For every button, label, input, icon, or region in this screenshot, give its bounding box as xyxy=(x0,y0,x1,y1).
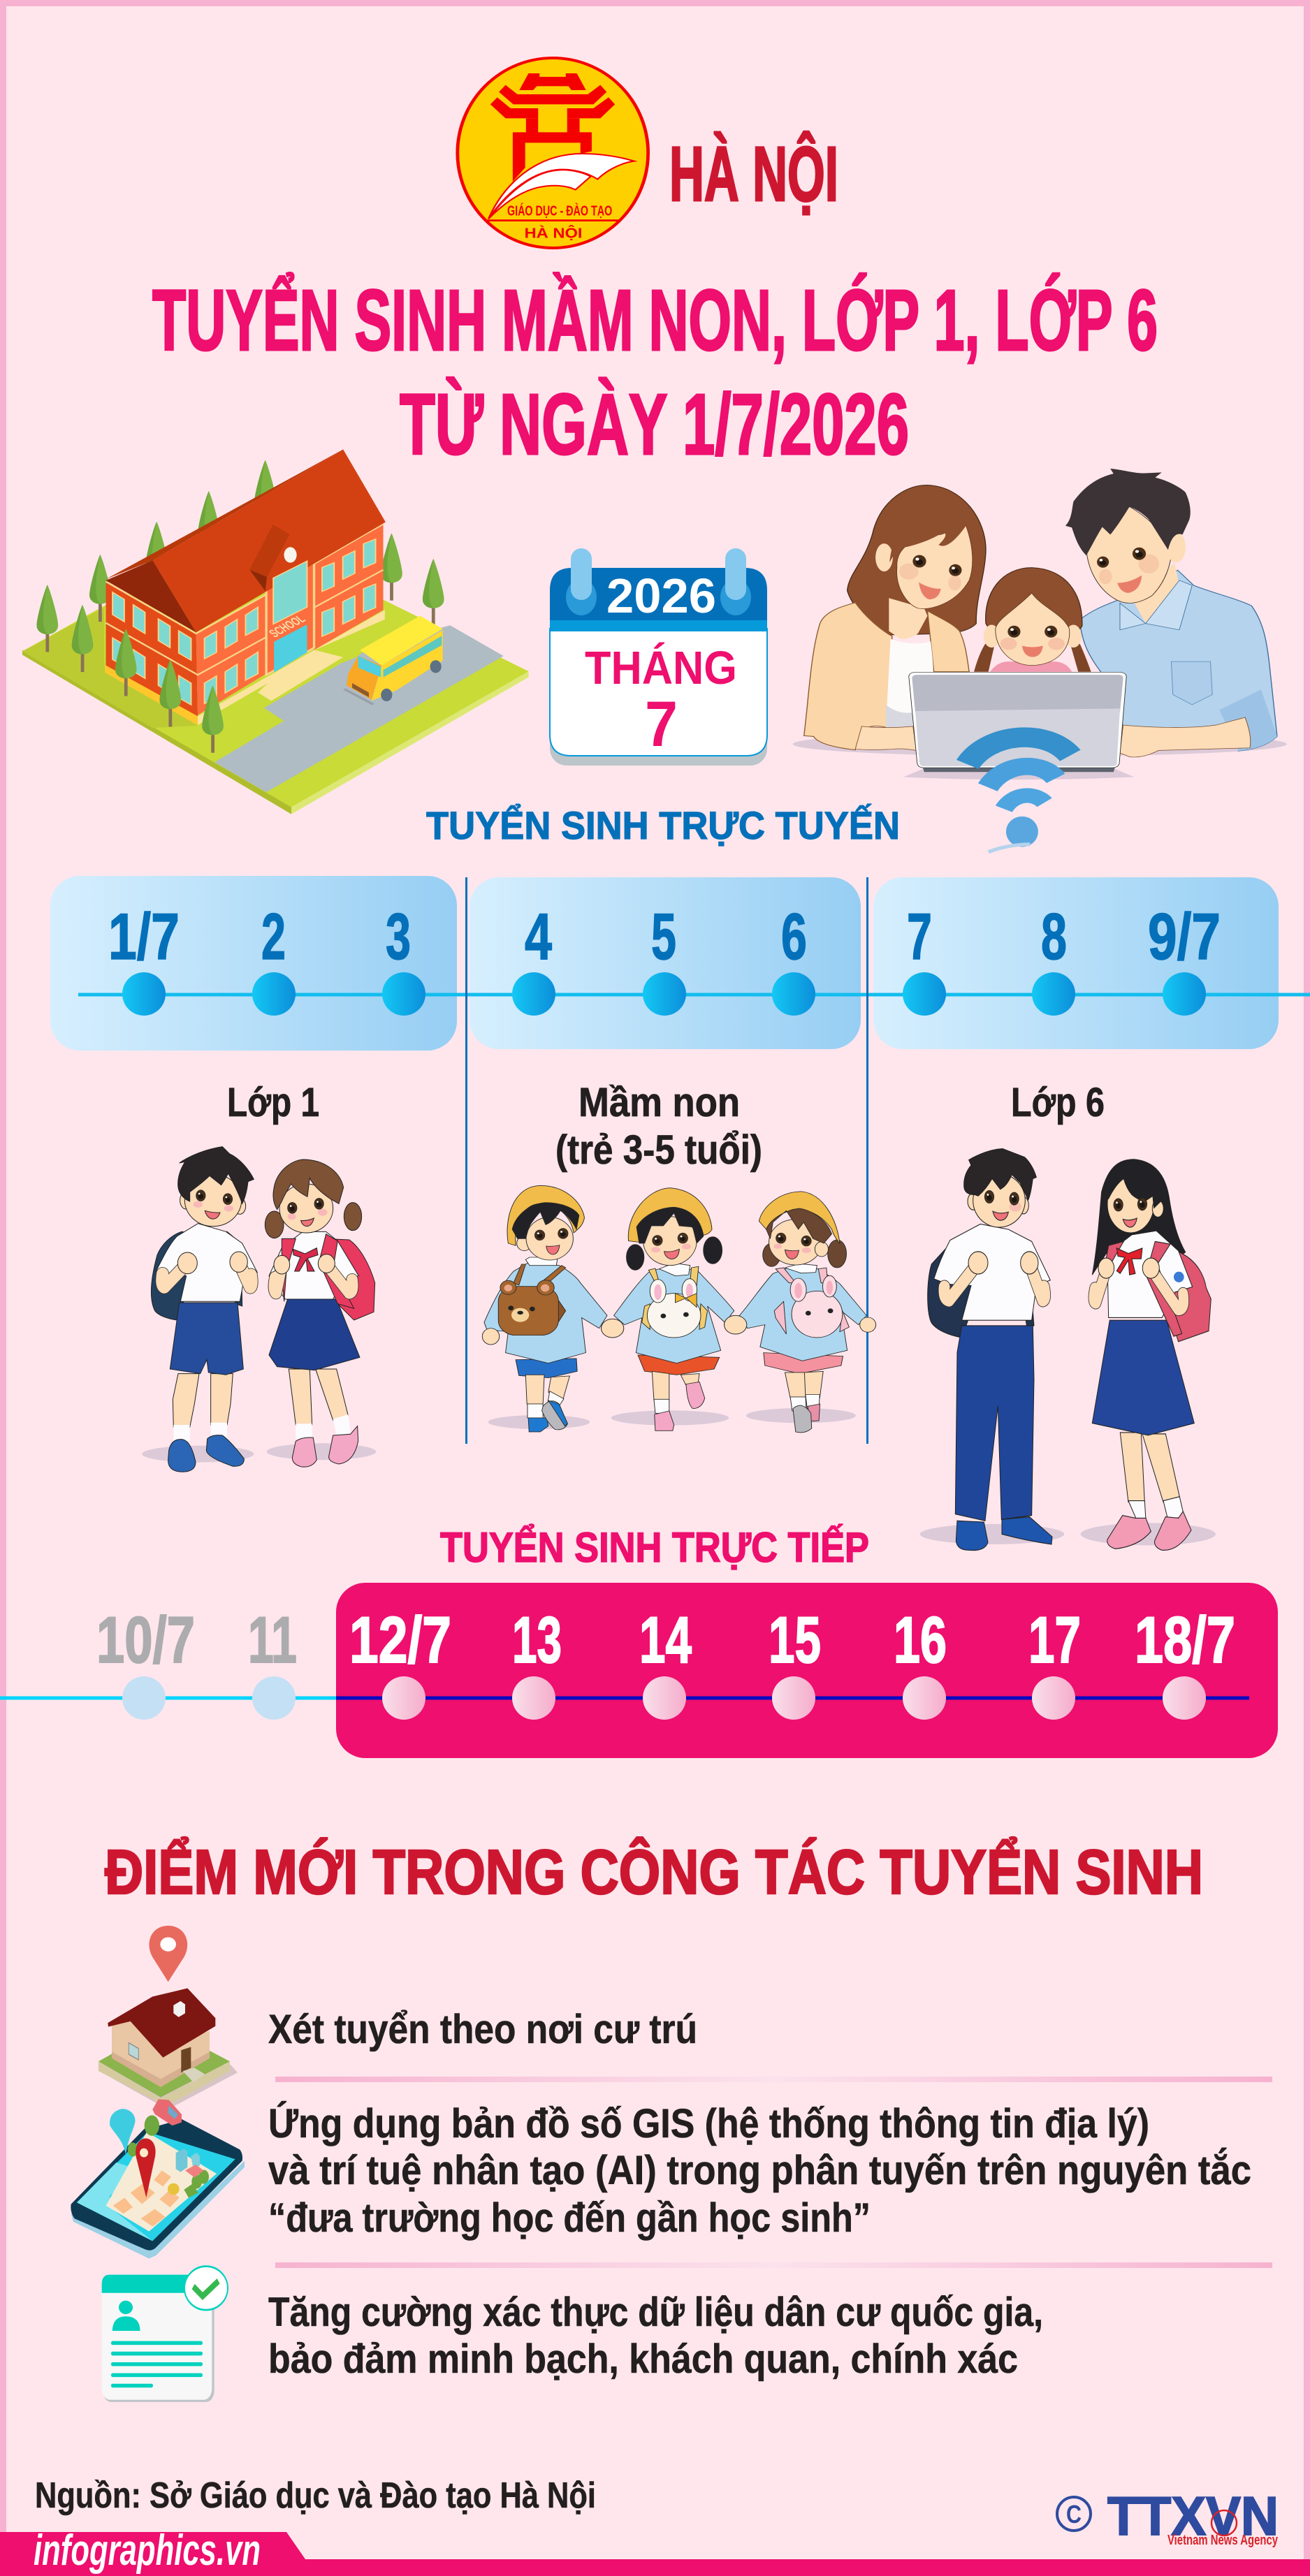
wifi symbol xyxy=(968,738,1070,852)
icon: verified resident record xyxy=(102,2267,228,2402)
column dividers xyxy=(465,877,868,1444)
girl xyxy=(265,1159,375,1467)
calendar: July 2026: 7 xyxy=(645,689,678,760)
logo: TTXVN: TTXVN xyxy=(1107,2485,1279,2547)
icon: phone with GIS map xyxy=(71,2099,245,2259)
illustration: school and bus: SCHOOL xyxy=(266,613,309,640)
footer site name: infographics.vn xyxy=(34,2526,261,2575)
timeline: online enrolment dates xyxy=(50,876,1310,1051)
label: preschool: (trẻ 3-5 tuổi) xyxy=(555,1127,762,1173)
boy xyxy=(151,1147,257,1472)
timeline: in-person enrolment dates: 15 xyxy=(769,1603,821,1676)
text: data verification: Tăng cường xác thực dữ liệu dân cư quốc gia, xyxy=(268,2290,1043,2335)
panel: Grade 1 dates xyxy=(50,876,457,1051)
laptop xyxy=(909,672,1126,772)
girl xyxy=(1092,1159,1211,1550)
daughter xyxy=(974,568,1091,672)
source: Nguồn: Sở Giáo dục và Đào tạo Hà Nội xyxy=(35,2475,596,2516)
timeline: in-person enrolment dates: 18/7 xyxy=(1135,1603,1235,1676)
calendar: July 2026: 2026 xyxy=(606,569,716,623)
illustration: school and bus xyxy=(22,449,529,814)
title: TỪ NGÀY 1/7/2026 xyxy=(400,377,909,473)
timeline: online enrolment dates: 8 xyxy=(1041,900,1067,973)
logo: Hanoi education department: HÀ NỘI xyxy=(524,224,583,241)
timeline: in-person enrolment dates: 14 xyxy=(639,1603,692,1676)
panel: preschool dates xyxy=(470,877,861,1049)
timeline: online enrolment dates: 6 xyxy=(781,900,807,973)
text: GIS and AI: Ứng dụng bản đồ số GIS (hệ thống thông tin địa lý) xyxy=(268,2101,1149,2146)
school bus xyxy=(344,616,443,704)
icon: house with location pin xyxy=(99,1926,238,2109)
timeline: online enrolment dates: 3 xyxy=(386,900,411,973)
timeline: online enrolment dates: 4 xyxy=(525,900,552,973)
timeline: in-person enrolment dates: 13 xyxy=(512,1603,562,1676)
boy with bear backpack xyxy=(482,1185,624,1432)
logo: TTXVN: C xyxy=(1066,2500,1082,2529)
timeline: in-person enrolment dates xyxy=(0,1583,1278,1758)
label: preschool xyxy=(555,1080,762,1173)
divider xyxy=(275,2077,1272,2082)
heading: Hà Nội: HÀ NỘI xyxy=(669,131,838,217)
title xyxy=(152,273,1158,473)
timeline: in-person enrolment dates: 12/7 xyxy=(349,1603,451,1676)
timeline: online enrolment dates: 7 xyxy=(907,900,932,973)
girl with pink bunny backpack xyxy=(725,1192,876,1433)
timeline: in-person enrolment dates: 16 xyxy=(894,1603,947,1676)
illustration: Grade 1 pupils xyxy=(142,1147,376,1472)
text: GIS and AI xyxy=(268,2101,1251,2241)
label: Grade 1: Lớp 1 xyxy=(227,1080,319,1125)
label: preschool: Mầm non xyxy=(578,1080,740,1125)
label: Grade 6: Lớp 6 xyxy=(1011,1080,1105,1125)
calendar: July 2026 xyxy=(550,548,767,766)
panel: Grade 6 dates xyxy=(873,877,1279,1049)
footer band xyxy=(0,2532,1310,2576)
illustration: preschool children xyxy=(482,1185,876,1433)
timeline: online enrolment dates: 2 xyxy=(261,900,286,973)
panel: pink date range xyxy=(336,1583,1278,1758)
timeline: online enrolment dates: 9/7 xyxy=(1148,900,1221,973)
text: data verification: bảo đảm minh bạch, khách quan, chính xác xyxy=(268,2336,1018,2382)
logo: Hanoi education department xyxy=(458,58,648,248)
text: data verification xyxy=(268,2290,1043,2382)
timeline: in-person enrolment dates: 17 xyxy=(1028,1603,1081,1676)
heading: in-person enrolment: TUYỂN SINH TRỰC TIẾP xyxy=(440,1524,869,1571)
illustration: family at laptop with wifi xyxy=(793,469,1287,852)
timeline: in-person enrolment dates: 10/7 xyxy=(96,1603,195,1676)
text: residence-based admission: Xét tuyển theo nơi cư trú xyxy=(268,2007,697,2052)
illustration: Grade 6 pupils xyxy=(920,1149,1216,1551)
timeline: online enrolment dates: 5 xyxy=(651,900,676,973)
logo: Hanoi education department: GIÁO DỤC - ĐÀO TẠO xyxy=(507,203,612,219)
divider xyxy=(275,2262,1272,2268)
girl with white bunny backpack xyxy=(602,1188,747,1430)
text: GIS and AI: “đưa trường học đến gần học sinh” xyxy=(268,2195,871,2241)
mother xyxy=(804,485,986,750)
timeline: in-person enrolment dates: 11 xyxy=(248,1603,297,1676)
boy xyxy=(928,1149,1052,1551)
timeline: online enrolment dates: 1/7 xyxy=(108,900,180,973)
calendar: July 2026: THÁNG xyxy=(585,642,737,694)
father xyxy=(1065,469,1277,757)
heading: online enrolment: TUYỂN SINH TRỰC TUYẾN xyxy=(426,803,900,847)
